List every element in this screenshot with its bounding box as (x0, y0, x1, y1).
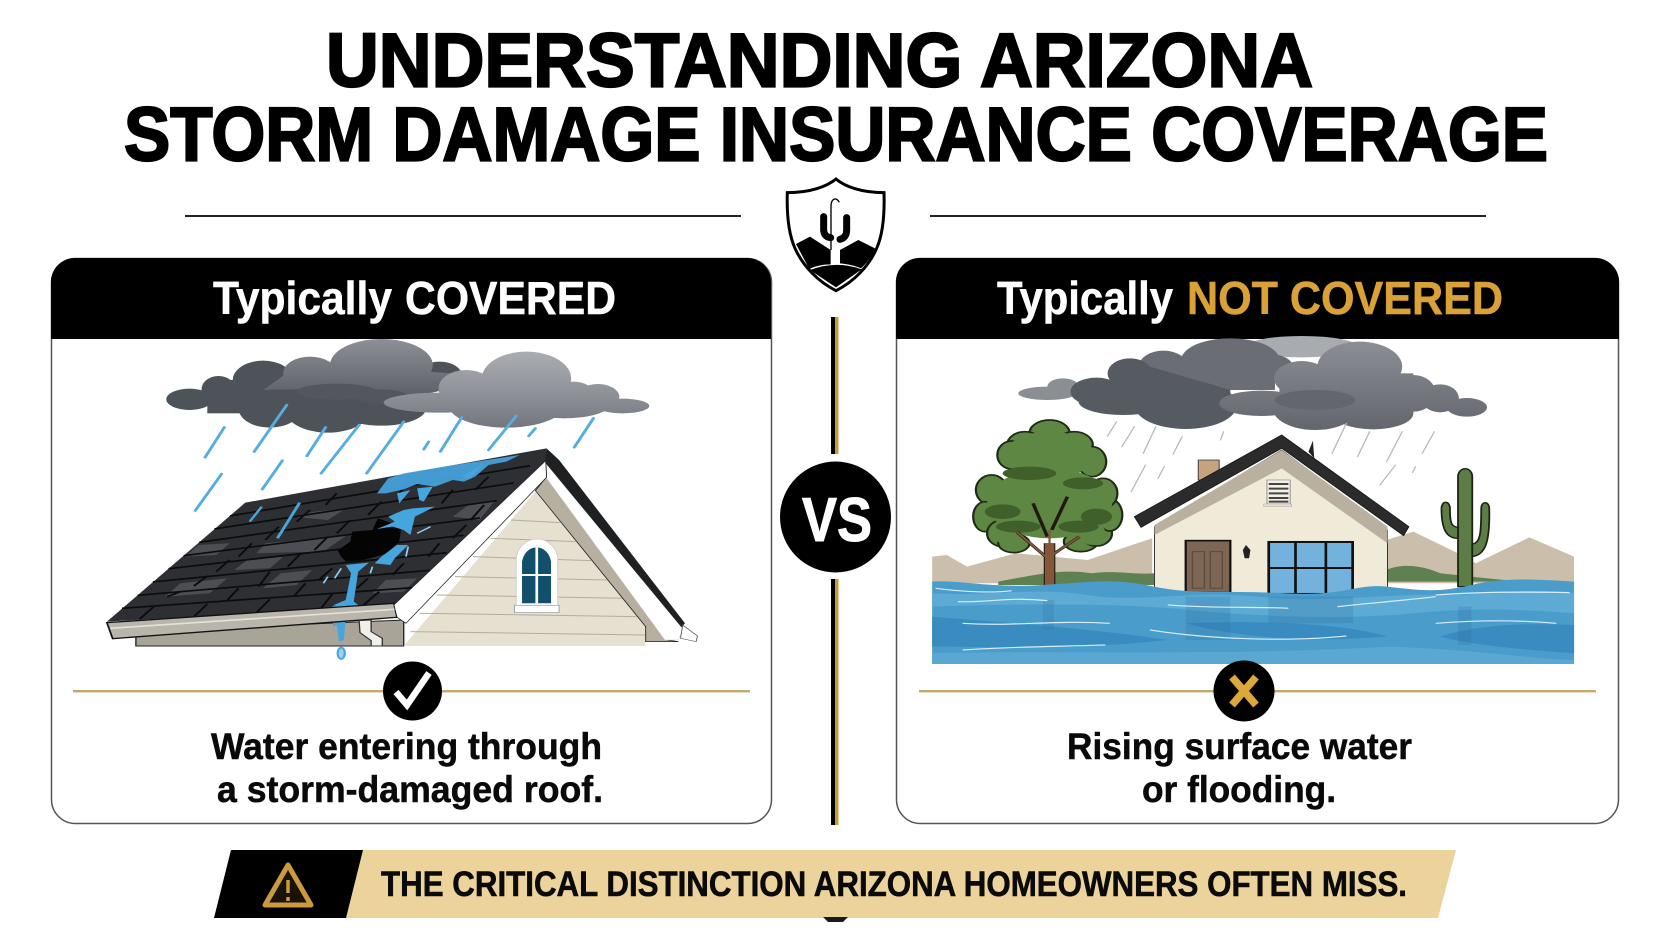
icon: warning triangle (265, 865, 311, 905)
house (1134, 435, 1409, 594)
mid grey cloud (263, 339, 453, 400)
wall under eave (136, 620, 404, 646)
wall (1154, 450, 1387, 593)
icon: check mark (383, 662, 442, 720)
title: UNDERSTANDING ARIZONA (326, 18, 1313, 104)
illustration: flooded house (932, 336, 1574, 664)
door (1186, 541, 1230, 593)
heading: typically covered (51, 258, 771, 339)
roof shingles (107, 448, 547, 622)
cactus (1441, 469, 1489, 587)
heading: typically not covered: Typically (997, 272, 1173, 324)
vent (1264, 480, 1291, 507)
light rain (1108, 422, 1434, 492)
gutter (107, 603, 397, 639)
water on roof (250, 455, 520, 642)
panel: typically not covered (896, 258, 1619, 824)
icon: cactus shield (787, 179, 884, 291)
dark storm cloud (166, 361, 462, 433)
rain streaks (195, 405, 593, 511)
water drop (338, 648, 345, 659)
title (124, 18, 1548, 178)
banner: critical distinction (214, 850, 1456, 922)
eave end cap (680, 625, 697, 642)
illustration: storm-damaged roof (107, 339, 697, 659)
tree (973, 420, 1122, 587)
heading: typically not covered: NOT COVERED (1187, 272, 1503, 324)
chimney (1198, 460, 1219, 480)
banner text: THE CRITICAL DISTINCTION ARIZONA HOMEOWNERS OFTEN MISS. (381, 865, 1407, 904)
heading: typically not covered (896, 258, 1619, 339)
left roof rake (394, 461, 547, 623)
right roof rake (535, 448, 685, 642)
gable wall with siding (404, 492, 646, 646)
attic window (514, 539, 559, 613)
title: STORM DAMAGE INSURANCE COVERAGE (124, 92, 1548, 178)
downspout (359, 620, 382, 646)
hole in roof (338, 518, 401, 562)
divider with check (73, 662, 750, 720)
vs badge (780, 462, 891, 572)
roof (1134, 435, 1409, 536)
panel: typically covered (51, 258, 772, 824)
icon: cross mark (1214, 660, 1274, 722)
flood water (932, 580, 1574, 664)
vs divider line (831, 317, 838, 825)
vs badge: VS (802, 486, 872, 555)
storm clouds (1018, 336, 1487, 430)
caption: not covered (1067, 726, 1412, 810)
caption: covered (211, 726, 603, 810)
heading: typically covered: Typically (213, 272, 392, 324)
gable shading (1154, 450, 1387, 543)
caption: covered: a storm-damaged roof. (217, 769, 603, 810)
caption: covered: Water entering through (211, 726, 602, 767)
shrubs (998, 566, 1525, 585)
mountains (932, 532, 1574, 583)
light grey cloud (384, 352, 649, 428)
divider with cross (919, 660, 1596, 722)
large window (1269, 542, 1353, 594)
heading: typically covered: COVERED (405, 272, 616, 324)
cloud shading (297, 384, 408, 404)
caption: not covered: Rising surface water (1067, 726, 1412, 767)
caption: not covered: or flooding. (1142, 769, 1336, 810)
wall lamp (1243, 545, 1250, 558)
banner pointer (823, 917, 848, 922)
